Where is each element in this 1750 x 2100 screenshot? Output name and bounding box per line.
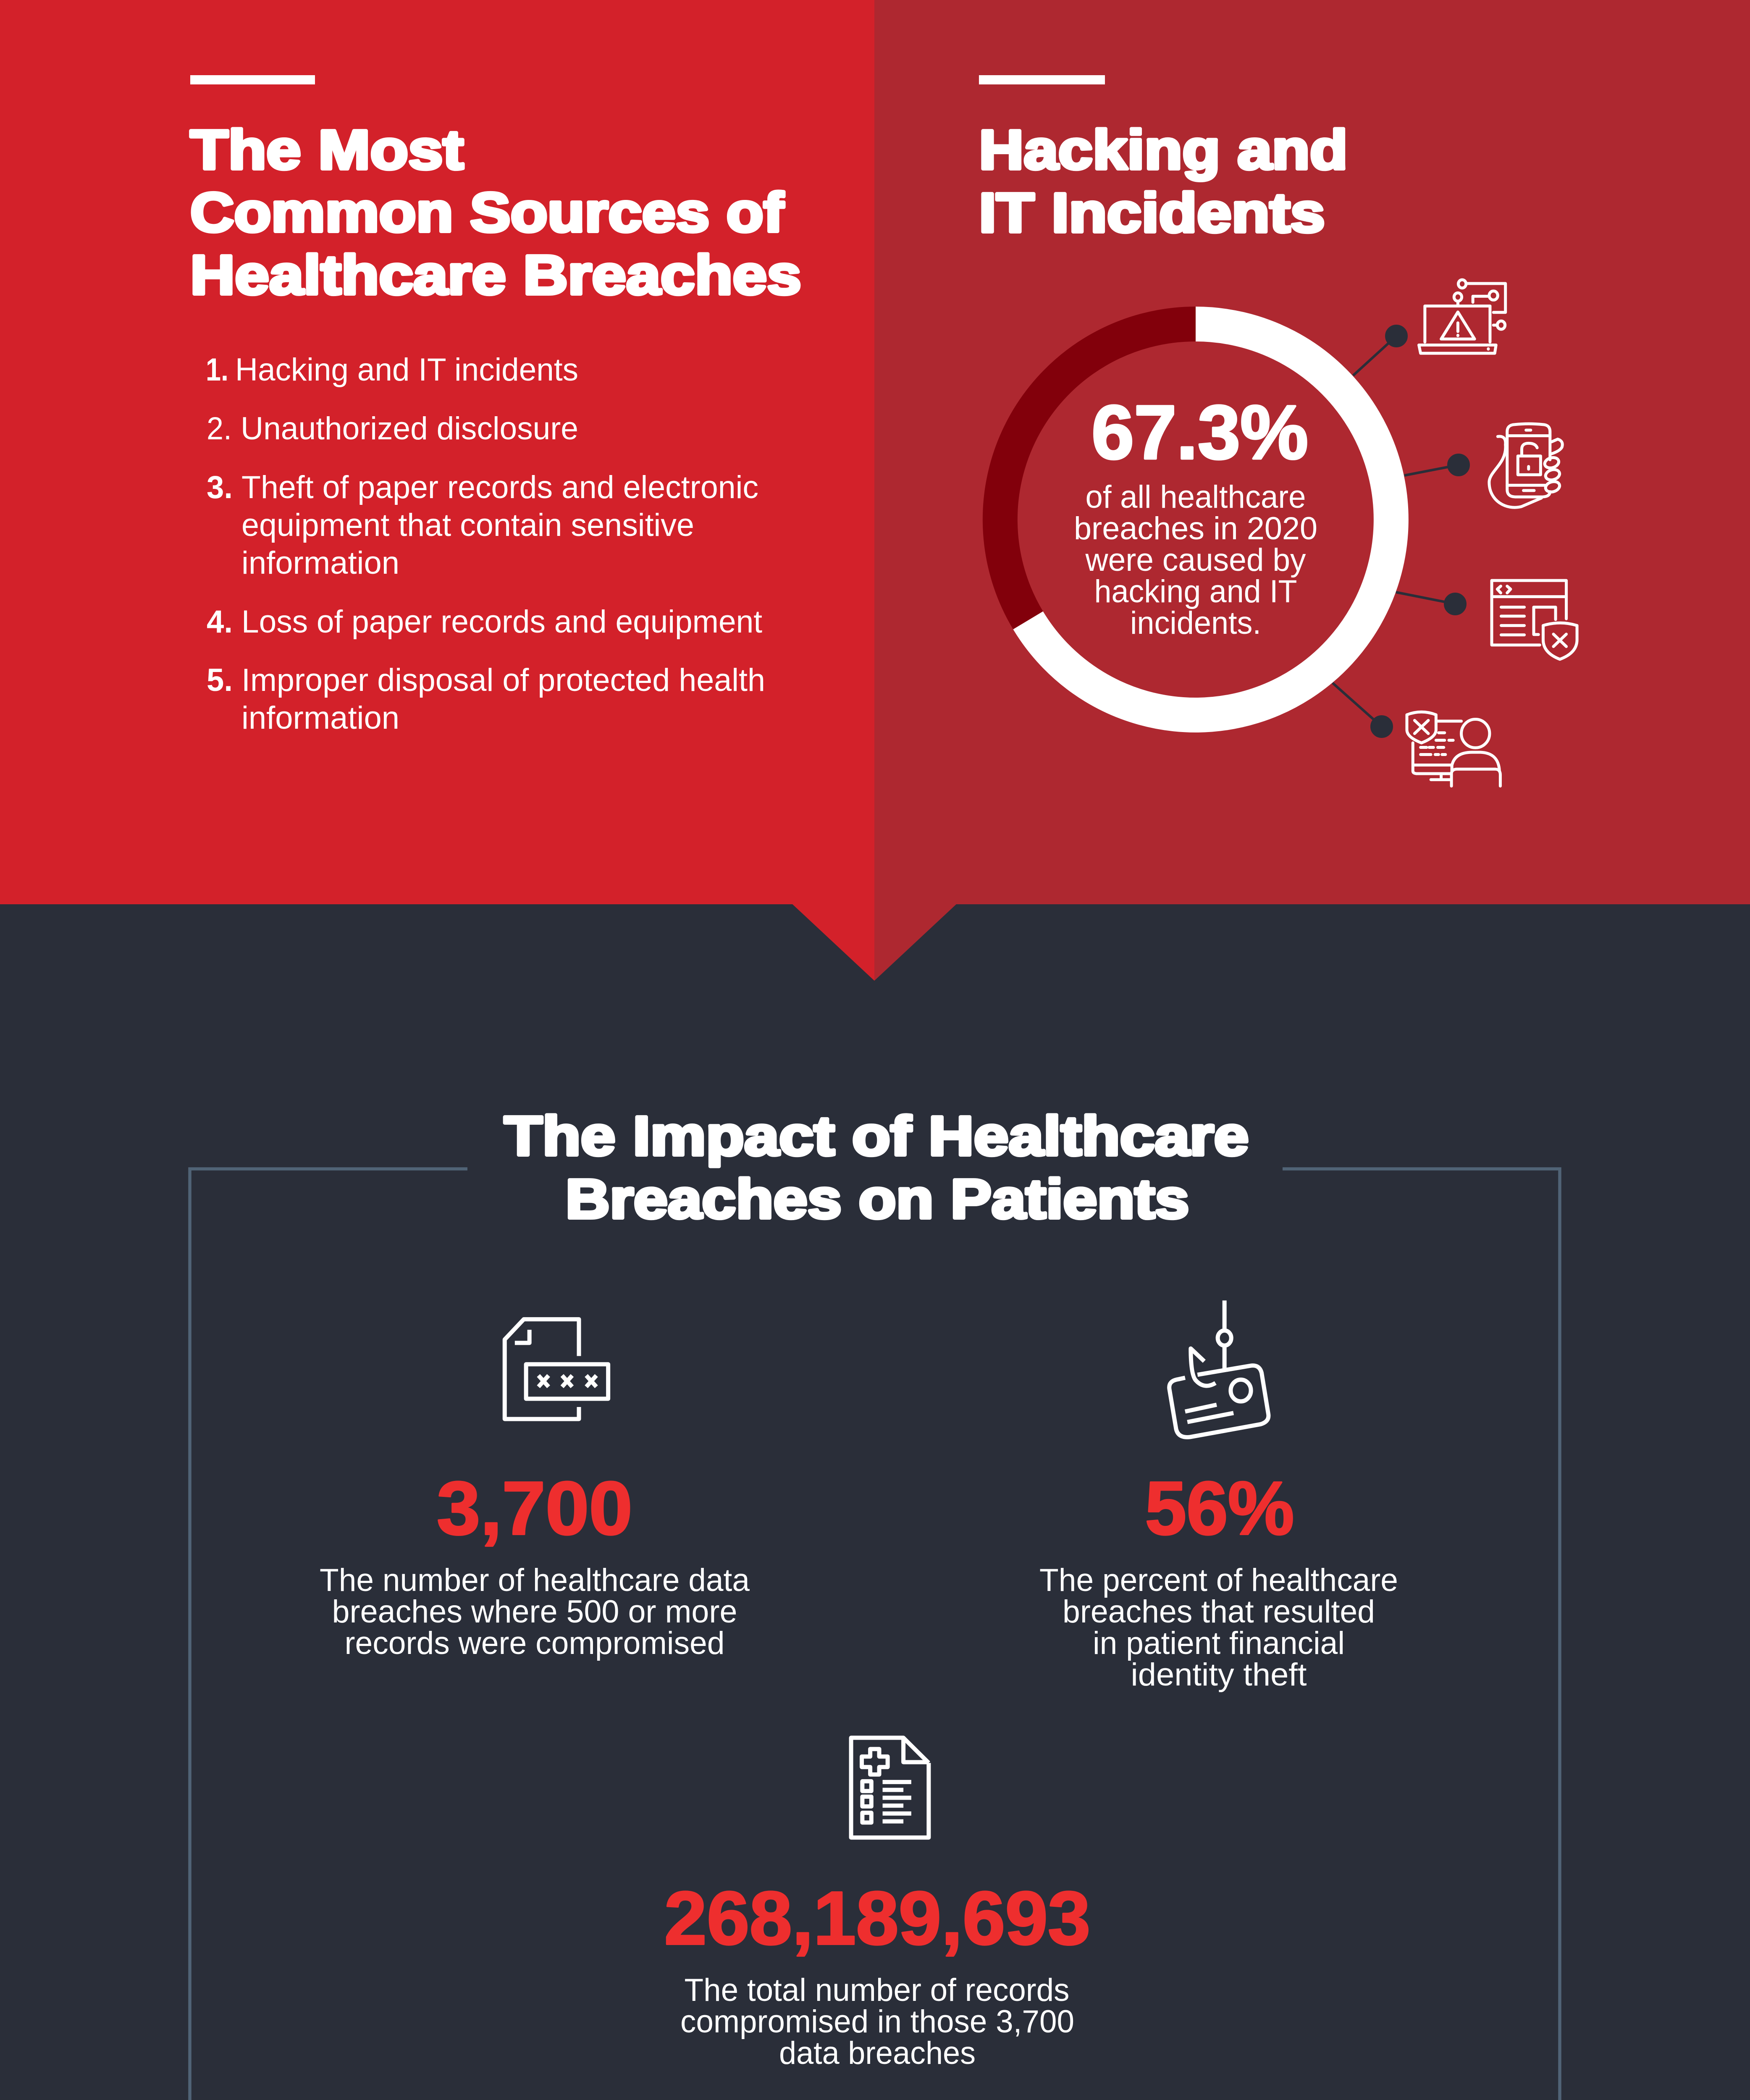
description [1039, 1562, 1398, 1693]
heading: common sources: Common Sources of [190, 181, 784, 243]
icon: phishing hook card [1169, 1300, 1268, 1437]
stat: 268,189,693 [664, 1738, 1090, 2071]
numbered list of sources: Unauthorized disclosure [241, 411, 578, 446]
numbered list of sources: equipment that contain sensitive [241, 507, 694, 543]
numbered list of sources [206, 352, 765, 736]
donut chart 67.3% [1000, 324, 1391, 715]
description: The total number of records [685, 1972, 1069, 2008]
heading: common sources: The Most [190, 119, 464, 181]
frame around impact panel [190, 1169, 1560, 2100]
heading: impact: The Impact of Healthcare [504, 1105, 1249, 1167]
figure: 268,189,693 [664, 1876, 1090, 1961]
figure: 56% [1145, 1466, 1294, 1551]
description: The number of healthcare data [320, 1562, 750, 1598]
donut caption: incidents. [1130, 605, 1261, 641]
accent bar [190, 75, 315, 84]
panel: hacking and IT incidents [874, 0, 1750, 981]
heading: common sources [190, 119, 801, 306]
numbered list of sources: information [241, 700, 399, 736]
description [320, 1562, 750, 1661]
description: data breaches [779, 2035, 976, 2071]
donut caption: hacking and IT [1094, 574, 1297, 609]
description [680, 1972, 1074, 2071]
numbered list of sources: 2. [207, 411, 232, 446]
description: The percent of healthcare [1039, 1562, 1398, 1598]
icon: browser shield [1492, 580, 1577, 659]
heading: hacking: IT Incidents [979, 182, 1325, 244]
description: compromised in those 3,700 [680, 2004, 1074, 2040]
numbered list of sources: information [241, 545, 399, 581]
heading: impact [504, 1105, 1249, 1230]
description: identity theft [1131, 1657, 1307, 1693]
numbered list of sources: Loss of paper records and equipment [241, 604, 762, 640]
numbered list of sources: 5. [207, 662, 233, 698]
panel: common sources [0, 0, 874, 981]
numbered list of sources: 1. [206, 352, 228, 388]
accent bar [979, 75, 1105, 84]
donut caption: of all healthcare [1085, 479, 1306, 515]
numbered list of sources: Theft of paper records and electronic [241, 470, 758, 505]
icon: phone lock in hand [1489, 424, 1562, 507]
numbered list of sources: 3. [207, 470, 233, 505]
stat: 56% [1039, 1300, 1398, 1693]
heading: impact: Breaches on Patients [565, 1168, 1189, 1230]
numbered list of sources: Hacking and IT incidents [235, 352, 578, 388]
donut figure: 67.3% [1091, 389, 1308, 475]
heading: common sources: Healthcare Breaches [190, 244, 801, 306]
stat: 3,700 breaches [320, 1319, 750, 1661]
numbered list of sources: 4. [207, 604, 233, 640]
icon: person with shield [1407, 712, 1500, 786]
donut caption [1074, 479, 1317, 641]
description: records were compromised [344, 1625, 725, 1661]
icon: laptop warning [1419, 280, 1506, 353]
donut caption: breaches in 2020 [1074, 511, 1317, 546]
figure: 3,700 [437, 1466, 632, 1551]
heading: hacking: Hacking and [979, 119, 1348, 181]
icon: password document [505, 1319, 608, 1419]
heading: hacking [979, 119, 1348, 244]
icon: medical record [851, 1738, 929, 1838]
description: breaches where 500 or more [332, 1594, 737, 1630]
description: breaches that resulted [1063, 1594, 1375, 1630]
description: in patient financial [1093, 1625, 1345, 1661]
connector lines and dots [1333, 326, 1469, 737]
numbered list of sources: Improper disposal of protected health [241, 662, 765, 698]
donut caption: were caused by [1085, 542, 1306, 578]
